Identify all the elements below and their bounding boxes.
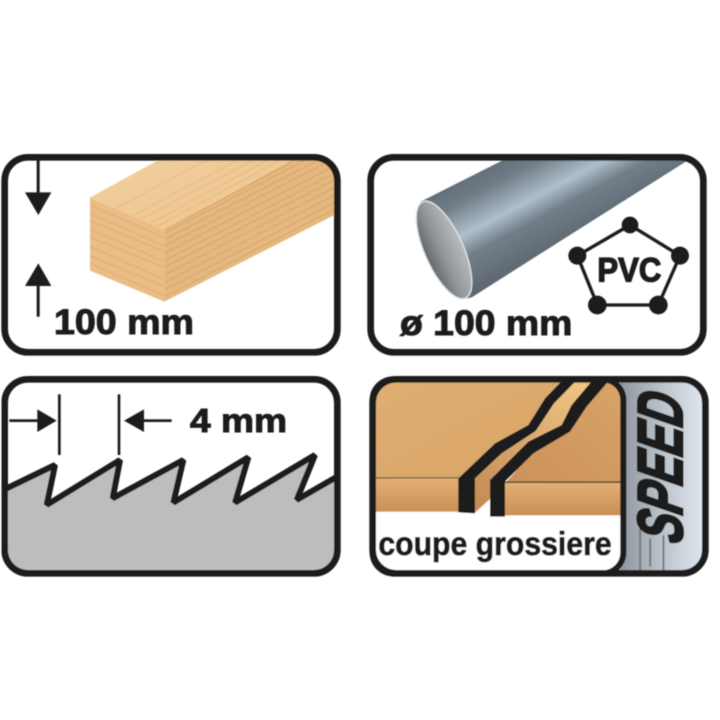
panel frame (5, 379, 337, 573)
panel: PVC pipe 100 mm (371, 157, 703, 352)
saw blade (3, 455, 340, 577)
pipe (405, 160, 688, 306)
panel frame (5, 157, 337, 352)
icon: PVC pentagon: PVC (597, 252, 661, 290)
arrow: up (25, 263, 51, 317)
panel frame (371, 157, 703, 352)
tooth pitch markers (9, 394, 172, 455)
panel: saw teeth 4 mm (3, 379, 340, 577)
label: coupe grossiere: coupe grossiere (378, 526, 612, 563)
arrow: down (25, 158, 51, 215)
label: diameter 100 mm: ø 100 mm (400, 304, 572, 343)
divider frame (373, 379, 623, 573)
label: SPEED: SPEED (625, 384, 696, 548)
label: 4 mm: 4 mm (190, 403, 287, 440)
panel: wood beam 100 mm (5, 145, 337, 352)
panel: rough cut SPEED (373, 379, 707, 573)
cut illustration (373, 379, 623, 573)
speed strip background (620, 379, 707, 573)
wood beam (90, 145, 334, 302)
panel frame (373, 379, 705, 573)
icon: PVC pentagon (568, 217, 689, 314)
speed lines (639, 528, 664, 570)
label: 100 mm: 100 mm (54, 303, 194, 342)
